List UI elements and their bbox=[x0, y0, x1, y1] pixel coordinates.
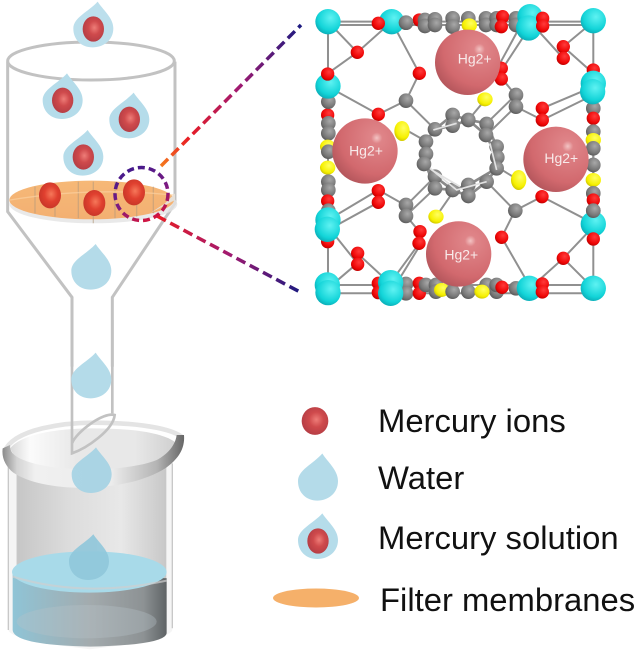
beaker body bbox=[8, 463, 172, 649]
sulfur atom on bottom edge bbox=[474, 285, 490, 299]
crystal structure cage bbox=[315, 4, 606, 306]
filter membrane bbox=[9, 181, 177, 223]
funnel tip bbox=[72, 320, 115, 453]
mercury ion: left: Hg2+ bbox=[349, 143, 383, 159]
left edge atoms bbox=[320, 94, 336, 218]
water drop in stem bbox=[71, 353, 111, 398]
water drop at rim bbox=[72, 447, 112, 493]
inner oxygen, carbon and sulfur atoms bbox=[351, 40, 600, 271]
funnel with mercury solution and filter membrane bbox=[8, 2, 177, 367]
mercury ion: right: Hg2+ bbox=[544, 150, 578, 166]
zoom dashed lines and circle bbox=[115, 25, 301, 292]
legend icon: water bbox=[298, 454, 338, 501]
water drop below membrane bbox=[71, 244, 111, 290]
legend label: water: Water bbox=[378, 459, 464, 496]
top edge atoms bbox=[399, 10, 523, 34]
bottom edge atoms bbox=[372, 277, 523, 301]
legend label: mercury solution: Mercury solution bbox=[378, 519, 619, 556]
legend icon: mercury ions bbox=[302, 407, 328, 435]
mercury ion: top: Hg2+ bbox=[458, 50, 492, 66]
mercury ion: right bbox=[523, 127, 589, 192]
legend icon: mercury solution bbox=[298, 513, 338, 559]
mercury ion: bottom bbox=[426, 221, 491, 287]
funnel glass outline bbox=[8, 42, 175, 367]
beaker bbox=[2, 320, 184, 649]
mercury solution drop: above funnel bbox=[73, 2, 113, 47]
mercury ion: left bbox=[332, 118, 398, 184]
water drop in liquid bbox=[69, 534, 109, 580]
legend label: filter membranes: Filter membranes bbox=[380, 581, 635, 618]
beaker rim bbox=[2, 423, 184, 488]
mercury ion: bottom: Hg2+ bbox=[444, 247, 478, 263]
legend label: mercury ions: Mercury ions bbox=[378, 402, 566, 439]
mercury solution drop: right bbox=[109, 93, 149, 138]
metal nodes bbox=[315, 4, 606, 306]
mercury solution drop: centre bbox=[63, 130, 103, 176]
central aromatic ring bbox=[417, 108, 505, 203]
mercury solution drop: left bbox=[43, 73, 83, 119]
mercury ions on membrane bbox=[39, 179, 145, 216]
water in beaker bbox=[12, 551, 167, 647]
legend bbox=[273, 402, 635, 618]
mercury ion: top bbox=[435, 30, 500, 95]
right edge atoms bbox=[586, 101, 601, 218]
legend icon: filter membrane bbox=[273, 588, 359, 608]
bonds bbox=[328, 22, 593, 293]
